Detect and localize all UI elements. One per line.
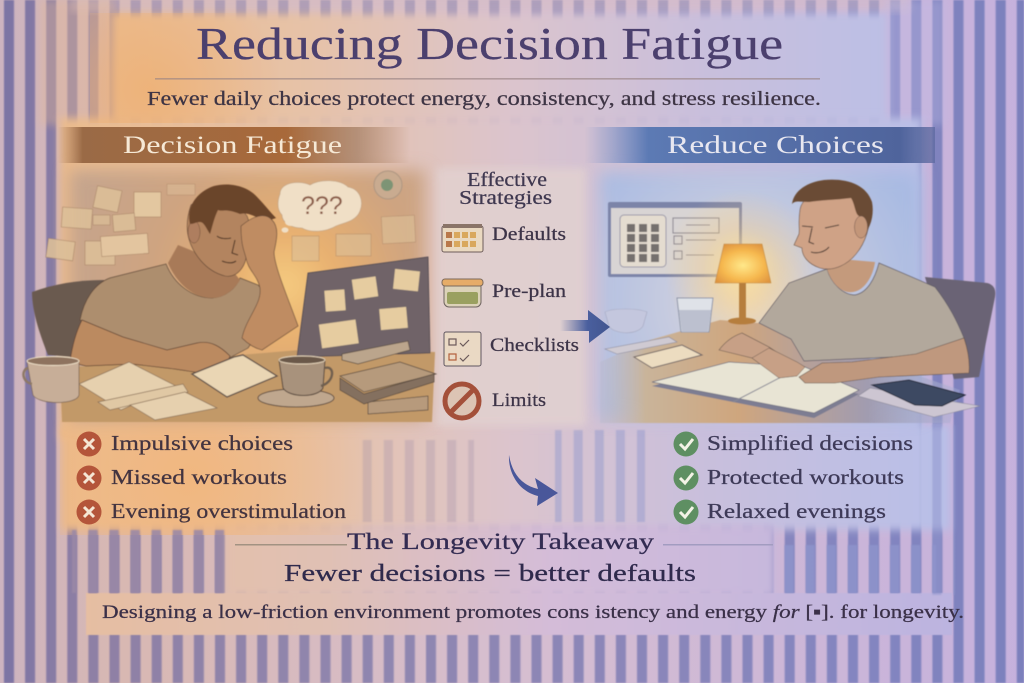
item: simplified decisions	[674, 431, 913, 456]
scene backdrop	[70, 170, 425, 420]
item: simplified decisions: Simplified decisions	[707, 431, 913, 455]
man: hair	[792, 180, 873, 232]
man: left arm	[70, 320, 230, 373]
item: protected workouts	[674, 465, 904, 490]
man: t-shirt	[80, 264, 278, 366]
strategy: defaults	[442, 224, 566, 252]
water glass	[677, 298, 713, 332]
smartphone	[872, 380, 965, 406]
man: left arm	[719, 333, 805, 378]
strategy: pre-plan	[442, 279, 567, 307]
green badge	[374, 171, 402, 199]
title: Reducing Decision Fatigue	[196, 19, 783, 69]
strategy: limits	[445, 384, 546, 418]
center panel strategy background	[436, 168, 586, 426]
man: hair	[189, 184, 276, 234]
chair	[32, 280, 104, 357]
footer note: Designing a low-friction environment promotes cons istency and energy for [▪]. for longevity.	[102, 602, 964, 623]
lamp glow	[664, 190, 820, 346]
divider	[155, 78, 820, 80]
thought bubble: ???	[301, 192, 343, 220]
man: head	[794, 190, 870, 269]
man: neck	[827, 258, 875, 292]
man: ear	[854, 216, 868, 238]
pen and small notebook	[605, 337, 702, 368]
secondary faded stripes	[72, 425, 955, 595]
chair	[925, 277, 995, 379]
item: evening overstimulation: Evening overstimulation	[111, 499, 347, 523]
man: neck	[168, 245, 240, 298]
arrow: center to right	[560, 310, 610, 343]
strategies heading: Effective	[467, 169, 547, 191]
stack of books	[340, 341, 436, 414]
scene artwork	[23, 171, 436, 422]
man: right arm	[799, 338, 969, 383]
scene artwork	[600, 180, 995, 423]
man: t-shirt	[759, 263, 964, 361]
right section header: Reduce Choices	[667, 132, 884, 159]
scene backdrop	[600, 172, 920, 417]
takeaway statement: Fewer decisions = better defaults	[284, 561, 696, 587]
desk	[60, 350, 435, 422]
list: positive outcomes	[674, 431, 913, 524]
man: face details	[217, 236, 238, 263]
thought bubble	[278, 181, 362, 233]
man: head	[187, 199, 250, 276]
strategy: limits: Limits	[492, 390, 546, 411]
open binder	[652, 362, 859, 418]
man: smile and eyes	[802, 225, 839, 253]
item: missed workouts	[76, 465, 287, 490]
desk lamp	[715, 244, 771, 324]
desk	[600, 320, 960, 423]
list: negative outcomes	[76, 431, 347, 524]
open notebook	[192, 355, 277, 397]
strategies heading: Strategies	[459, 187, 552, 209]
man: ear	[188, 221, 200, 243]
wall planner board	[608, 202, 742, 277]
strategy: checklists	[444, 332, 579, 366]
left scene	[23, 170, 436, 422]
item: protected workouts: Protected workouts	[707, 465, 904, 489]
left section header: Decision Fatigue	[123, 132, 342, 159]
item: relaxed evenings	[674, 499, 886, 524]
strategy: checklists: Checklists	[490, 335, 579, 356]
wall sticky notes	[46, 184, 416, 265]
right scene	[600, 172, 995, 423]
arrow: curved down to takeaway	[509, 455, 558, 506]
laptop	[297, 257, 430, 357]
man: raised arm	[241, 216, 298, 350]
strategies heading	[459, 169, 552, 209]
subtitle: Fewer daily choices protect energy, consistency, and stress resilience.	[147, 88, 821, 110]
strategy: defaults: Defaults	[492, 224, 566, 245]
item: impulsive choices	[76, 431, 293, 456]
item: missed workouts: Missed workouts	[111, 465, 287, 489]
strategy: pre-plan: Pre-plan	[492, 281, 567, 302]
item: impulsive choices: Impulsive choices	[111, 431, 293, 455]
paper under phone	[858, 388, 980, 417]
papers	[79, 362, 217, 420]
left coffee mug	[23, 356, 79, 402]
faded teacup	[605, 309, 647, 333]
left hand on binder	[752, 348, 805, 378]
panel: soft central paper	[60, 13, 952, 635]
center coffee cup	[258, 356, 334, 407]
right section header	[585, 127, 935, 163]
takeaway heading: The Longevity Takeaway	[347, 529, 655, 554]
left section header	[58, 127, 410, 163]
item: relaxed evenings: Relaxed evenings	[707, 499, 886, 523]
